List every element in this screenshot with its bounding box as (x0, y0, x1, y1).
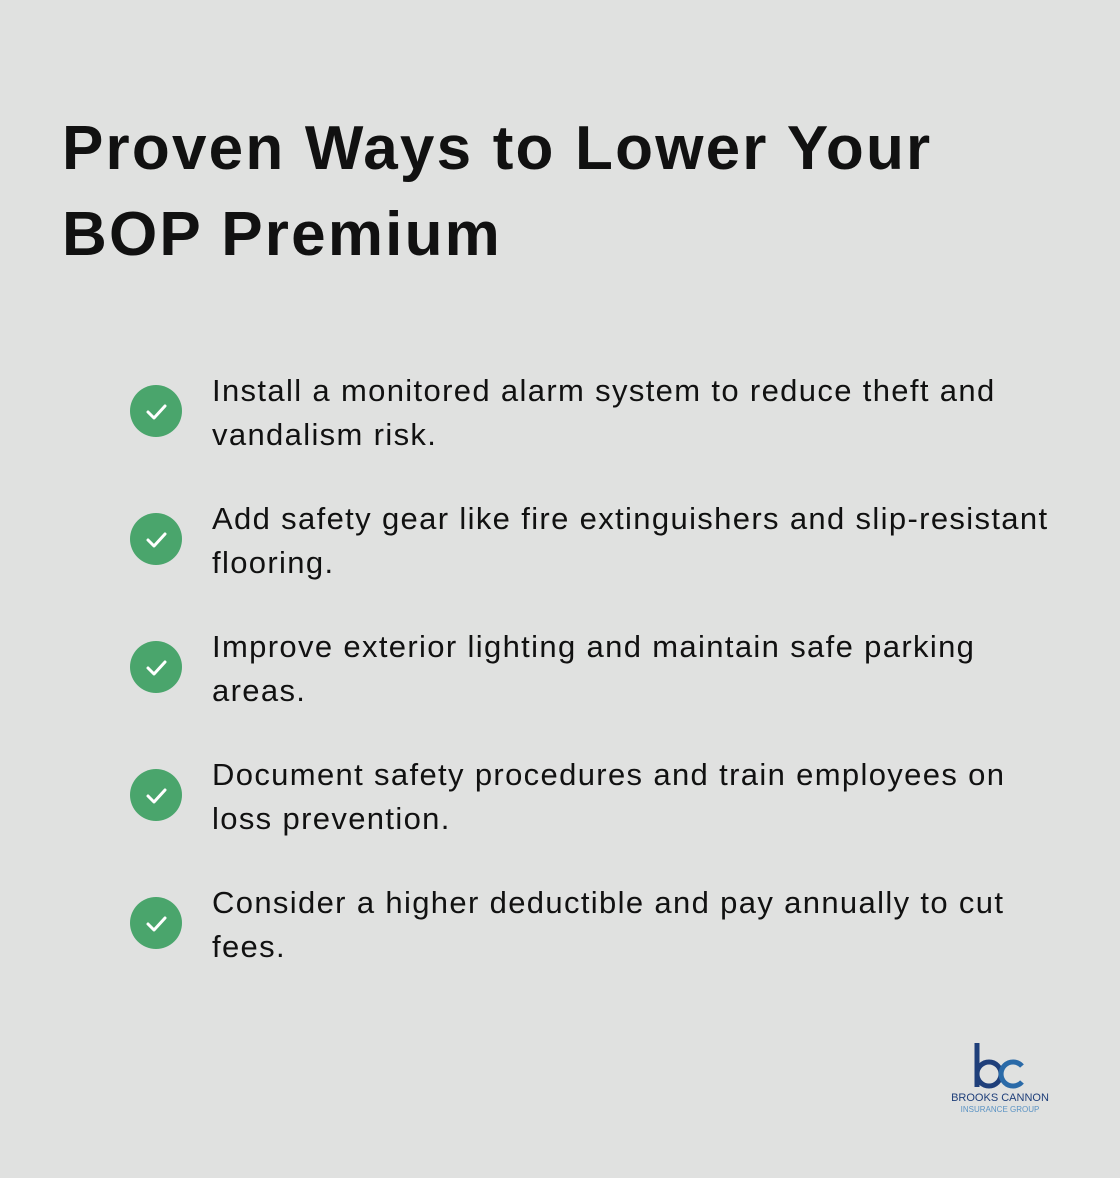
text: Document safety procedures and train employees on (212, 757, 1005, 792)
item 3 (130, 629, 975, 708)
icon: check (130, 769, 182, 821)
icon: check (130, 641, 182, 693)
text: fees. (212, 929, 286, 964)
title (62, 114, 932, 269)
logo: INSURANCE GROUP (961, 1105, 1039, 1114)
item 4 (130, 757, 1005, 836)
logo (951, 1043, 1049, 1114)
item 1 (130, 373, 996, 452)
item 2 (130, 501, 1048, 580)
icon: check (130, 513, 182, 565)
text (212, 501, 1048, 580)
text (212, 373, 996, 452)
icon: check (130, 385, 182, 437)
title: BOP Premium (62, 200, 502, 269)
text (212, 885, 1004, 964)
text: Install a monitored alarm system to reduce theft and (212, 373, 996, 408)
item 5 (130, 885, 1004, 964)
text: loss prevention. (212, 801, 451, 836)
text: areas. (212, 673, 306, 708)
text: Add safety gear like fire extinguishers and slip-resistant (212, 501, 1048, 536)
text (212, 629, 975, 708)
text: flooring. (212, 545, 334, 580)
logo: BROOKS CANNON (951, 1092, 1049, 1104)
title: Proven Ways to Lower Your (62, 114, 932, 183)
text: Consider a higher deductible and pay annually to cut (212, 885, 1004, 920)
text (212, 757, 1005, 836)
text: Improve exterior lighting and maintain safe parking (212, 629, 975, 664)
text: vandalism risk. (212, 417, 437, 452)
icon: check (130, 897, 182, 949)
